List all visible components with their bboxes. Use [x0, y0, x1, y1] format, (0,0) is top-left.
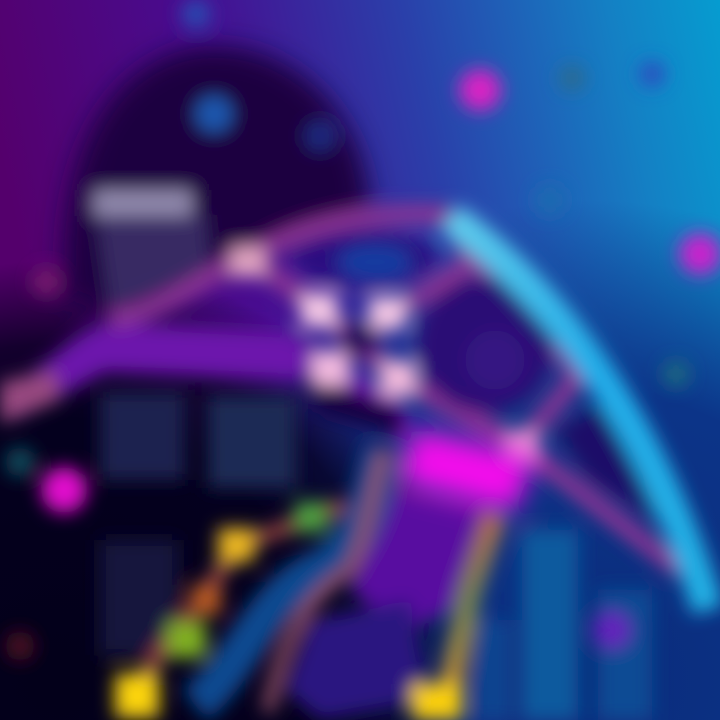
lower left dark panels — [100, 392, 296, 655]
magenta block — [398, 428, 536, 512]
purple band roof — [0, 322, 405, 438]
lower right blue bars — [476, 530, 652, 720]
grey building under dome — [94, 190, 210, 310]
pink network lines — [110, 214, 680, 570]
dark dome — [64, 46, 370, 312]
dark wedge right — [555, 405, 665, 525]
orange vertical strip — [412, 515, 495, 720]
blue winding band — [195, 450, 385, 712]
cyan arc — [450, 218, 708, 610]
colored dotted chain — [115, 502, 345, 718]
dark circle — [417, 277, 553, 413]
purple column — [285, 490, 495, 720]
light checker nodes — [231, 247, 539, 462]
dark blue eye ellipse — [293, 230, 437, 286]
